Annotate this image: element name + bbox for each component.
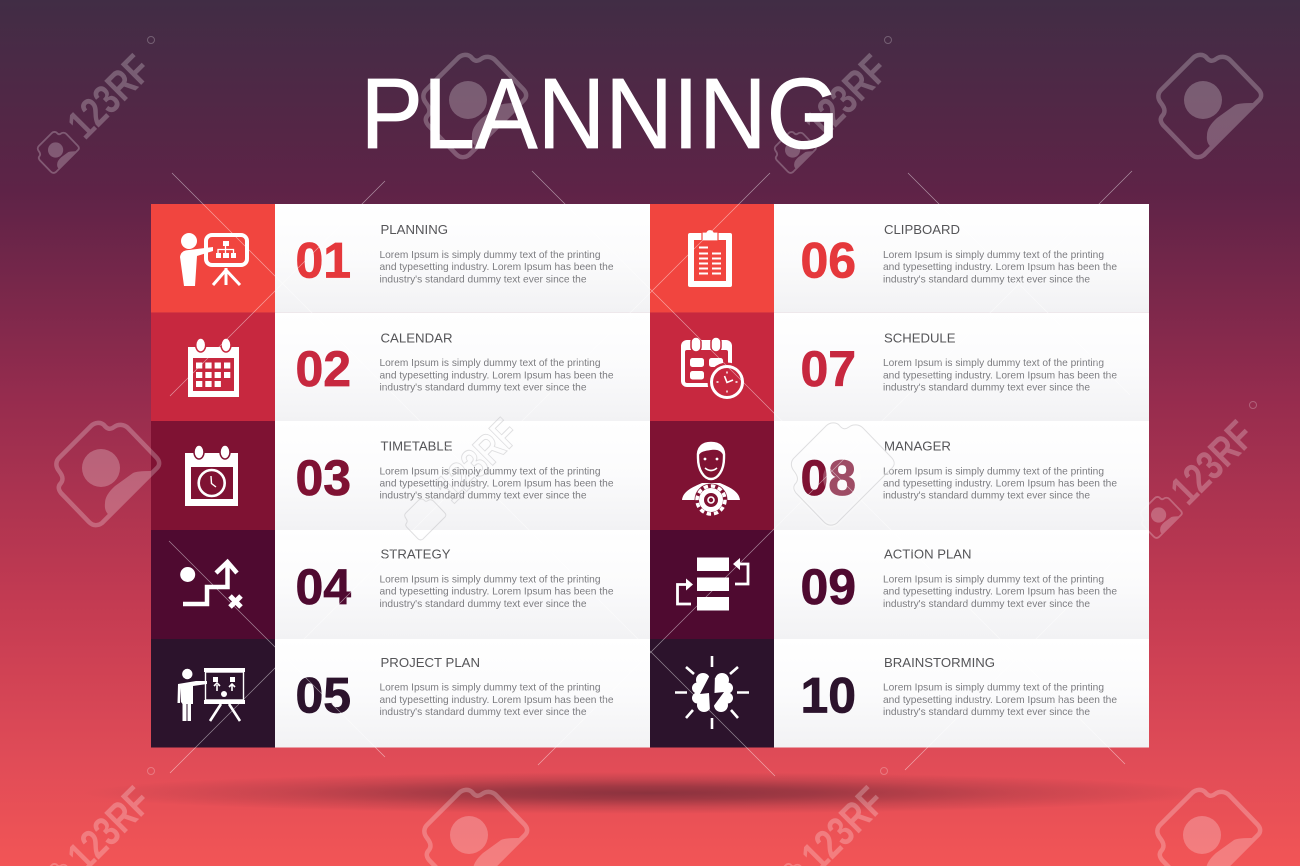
body text: industry's standard dummy text ever since the (883, 383, 1090, 394)
watermarks: 123RF (1161, 412, 1263, 513)
body text: industry's standard dummy text ever since the (380, 274, 587, 285)
title: PLANNING (360, 58, 840, 170)
body text (883, 683, 1117, 718)
body text: Lorem Ipsum is simply dummy text of the printing (883, 250, 1104, 261)
body text (380, 250, 614, 285)
number 01: 01 (296, 232, 351, 288)
number 02: 02 (296, 341, 351, 397)
body text: and typesetting industry. Lorem Ipsum has been the (380, 587, 614, 598)
body text: Lorem Ipsum is simply dummy text of the printing (380, 574, 601, 586)
heading: SCHEDULE (884, 330, 956, 345)
watermarks: 123RF (795, 46, 897, 147)
panel: option 06 clipboard (650, 204, 1149, 313)
body text: and typesetting industry. Lorem Ipsum has been the (883, 587, 1117, 598)
body text (883, 574, 1117, 610)
body text: and typesetting industry. Lorem Ipsum has been the (883, 262, 1117, 273)
body text: and typesetting industry. Lorem Ipsum has been the (883, 695, 1117, 706)
heading: CLIPBOARD (884, 222, 960, 237)
body text: industry's standard dummy text ever since the (380, 599, 587, 610)
watermark on white panel (405, 410, 894, 540)
heading: STRATEGY (380, 547, 451, 562)
body text: Lorem Ipsum is simply dummy text of the printing (380, 466, 601, 477)
body text: and typesetting industry. Lorem Ipsum has been the (380, 370, 614, 381)
body text: Lorem Ipsum is simply dummy text of the printing (883, 466, 1104, 477)
body text: industry's standard dummy text ever since the (380, 491, 587, 502)
body text: industry's standard dummy text ever since the (883, 599, 1090, 610)
number 07: 07 (800, 341, 856, 397)
body text: industry's standard dummy text ever since the (883, 707, 1090, 718)
body text: industry's standard dummy text ever since the (883, 491, 1090, 502)
panel: option 05 project plan (151, 639, 650, 748)
panel: option 10 brainstorming (650, 639, 1149, 748)
icon: clipboard (688, 230, 732, 287)
body text: industry's standard dummy text ever since the (883, 274, 1090, 285)
panel: option 01 planning (151, 204, 650, 313)
heading: ACTION PLAN (884, 547, 972, 562)
body text (380, 358, 614, 394)
body text (883, 358, 1117, 394)
panel: options grid (151, 204, 1149, 748)
number 10: 10 (800, 668, 856, 724)
icon: brain with lightning (675, 656, 749, 729)
panel: option 08 manager (650, 421, 1149, 530)
panel: option 04 strategy (151, 530, 650, 639)
number 04: 04 (296, 559, 351, 615)
number 03: 03 (296, 450, 351, 506)
number 08: 08 (800, 450, 856, 506)
body text: Lorem Ipsum is simply dummy text of the printing (380, 250, 601, 261)
body text: Lorem Ipsum is simply dummy text of the printing (883, 574, 1104, 586)
body text: Lorem Ipsum is simply dummy text of the printing (883, 683, 1104, 694)
icon: presenter at flip board (178, 668, 245, 721)
panel: option 03 timetable (151, 421, 650, 530)
number 09: 09 (800, 559, 856, 615)
body text (380, 574, 614, 610)
number 06: 06 (800, 232, 856, 288)
body text: and typesetting industry. Lorem Ipsum has been the (380, 478, 614, 490)
body text: and typesetting industry. Lorem Ipsum has been the (380, 695, 614, 706)
body text: industry's standard dummy text ever since the (380, 707, 587, 718)
heading: PROJECT PLAN (380, 655, 480, 670)
heading: PLANNING (380, 222, 448, 237)
body text (883, 250, 1117, 285)
body text (883, 466, 1117, 502)
body text: Lorem Ipsum is simply dummy text of the printing (380, 358, 601, 369)
icon: action plan blocks with arrows (678, 558, 748, 610)
body text (380, 466, 614, 502)
heading: CALENDAR (380, 330, 452, 345)
body text: and typesetting industry. Lorem Ipsum has been the (380, 262, 614, 273)
watermark on white panel: 123RF (426, 410, 528, 511)
heading: MANAGER (884, 438, 951, 454)
panel: option 09 action plan (650, 530, 1149, 639)
body text: and typesetting industry. Lorem Ipsum has been the (883, 370, 1117, 381)
icon: manager with gear (682, 443, 740, 516)
panel: option 02 calendar (151, 313, 650, 421)
icon: calendar with clock (185, 445, 238, 506)
body text: and typesetting industry. Lorem Ipsum has been the (883, 478, 1117, 490)
watermarks: 123RF (58, 46, 160, 147)
body text: industry's standard dummy text ever since the (380, 383, 587, 394)
body text: Lorem Ipsum is simply dummy text of the printing (883, 358, 1104, 369)
icon: calendar (188, 338, 239, 397)
icon: presenter with org chart (180, 233, 247, 286)
body text (380, 683, 614, 718)
ground shadow (83, 772, 1213, 814)
panel: option 07 schedule (650, 313, 1149, 421)
body text: Lorem Ipsum is simply dummy text of the printing (380, 683, 601, 694)
icon: calendar and clock (681, 337, 746, 402)
icon: strategy stairs (180, 562, 241, 607)
number 05: 05 (296, 668, 351, 724)
heading: TIMETABLE (380, 438, 453, 454)
heading: BRAINSTORMING (884, 655, 995, 670)
